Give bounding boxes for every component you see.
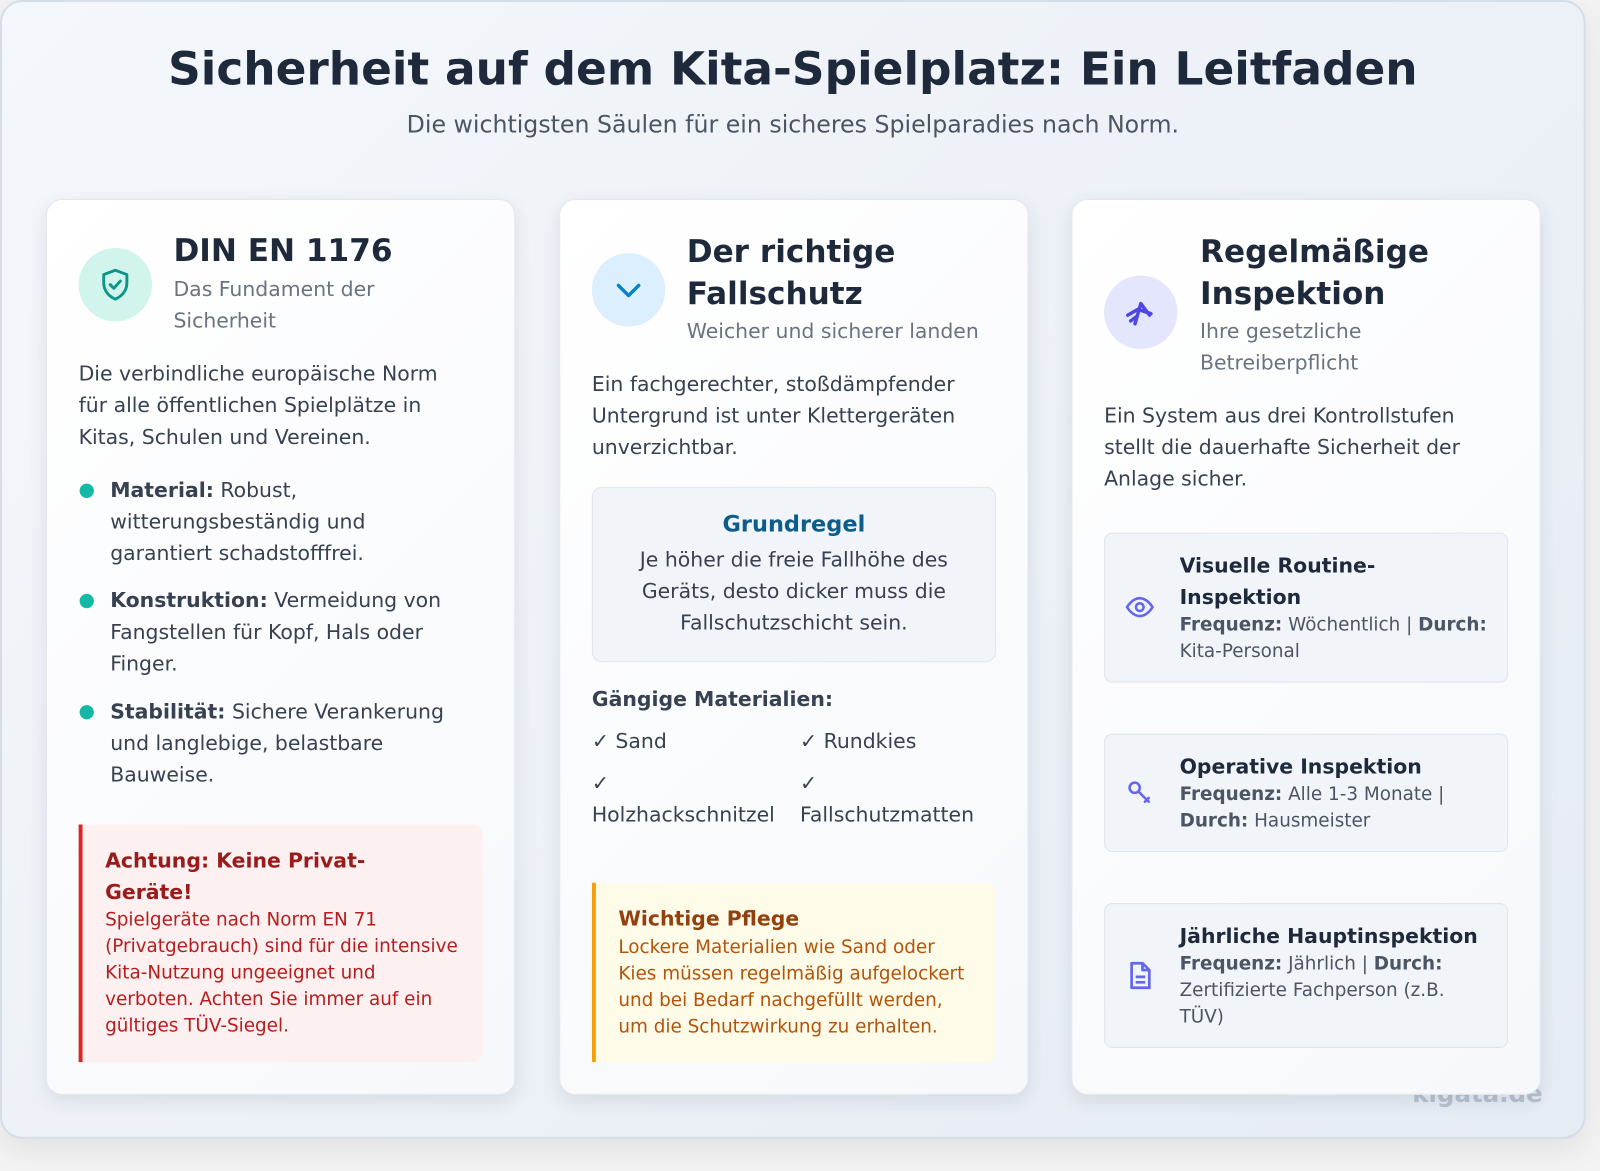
bullet: construction: Konstruktion: Vermeidung von Fangstellen für Kopf, Hals oder Finger. bbox=[110, 588, 441, 676]
materials list: ✓ bbox=[592, 770, 609, 795]
panel: Fallschutz bbox=[559, 199, 1029, 1095]
item: operative: Operative Inspektion bbox=[1180, 754, 1422, 779]
description: Die verbindliche europäische Norm für alle öffentlichen Spielplätze in Kitas, Schulen und Vereinen. bbox=[79, 361, 438, 449]
panel: Inspektion bbox=[1071, 199, 1541, 1095]
sub heading: Sicherheit bbox=[173, 308, 276, 333]
panel: DIN EN 1176 bbox=[46, 199, 515, 1095]
callout: Pflege: Wichtige Pflege bbox=[618, 906, 799, 931]
materials heading: Gängige Materialien: bbox=[592, 687, 833, 711]
materials list: Fallschutzmatten bbox=[800, 802, 974, 827]
item: visual: Visuelle Routine-Inspektion bbox=[1180, 553, 1375, 609]
bullet: material: Material: Robust, witterungsbeständig und garantiert schadstofffrei. bbox=[110, 478, 365, 565]
watermark: kigata.de bbox=[1412, 1080, 1543, 1108]
subtitle: Die wichtigsten Säulen für ein sicheres Spielparadies nach Norm. bbox=[407, 111, 1179, 139]
description: Ein fachgerechter, stoßdämpfender Untergrund ist unter Klettergeräten unverzichtbar. bbox=[592, 371, 955, 459]
item: operative bbox=[1104, 734, 1508, 852]
sub heading: Ihre gesetzliche bbox=[1200, 318, 1361, 343]
callout: Pflege bbox=[592, 883, 996, 1062]
materials list: Holzhackschnitzel bbox=[592, 802, 775, 827]
item: annual bbox=[1104, 903, 1508, 1048]
callout: warning bbox=[79, 824, 483, 1062]
sub heading bbox=[1200, 318, 1361, 374]
heading bbox=[687, 235, 895, 312]
sub heading: Betreiberpflicht bbox=[1200, 350, 1358, 374]
sub heading: Weicher und sicherer landen bbox=[687, 318, 979, 343]
heading: Der richtige bbox=[687, 235, 895, 270]
item: visual: Frequenz: Wöchentlich | Durch: Kita-Personal bbox=[1180, 614, 1487, 662]
icon: wrench bbox=[1128, 781, 1150, 804]
callout: Pflege: Lockere Materialien wie Sand oder Kies müssen regelmäßig aufgelockert und bei Bedarf nachgefüllt werden, um die Schutzwirkung zu erhalten. bbox=[618, 937, 964, 1038]
icon: eye bbox=[1126, 596, 1154, 618]
item: annual: Jährliche Hauptinspektion bbox=[1180, 923, 1478, 948]
heading: Fallschutz bbox=[687, 277, 863, 312]
bullet: stability: Stabilität: Sichere Verankerung und langlebige, belastbare Bauweise. bbox=[110, 699, 444, 787]
item: operative: Frequenz: Alle 1-3 Monate | Durch: Hausmeister bbox=[1180, 784, 1444, 832]
icon: shield bbox=[79, 248, 152, 321]
icon: chevron bbox=[592, 253, 665, 327]
materials list: ✓ Rundkies bbox=[800, 729, 916, 753]
callout: warning: Spielgeräte nach Norm EN 71 (Privatgebrauch) sind für die intensive Kita-Nutzung ungeeignet und verboten. Achten Sie immer auf ein gültiges TÜV-Siegel. bbox=[105, 909, 458, 1037]
title: Sicherheit auf dem Kita-Spielplatz: Ein Leitfaden bbox=[168, 44, 1418, 96]
icon: inspection bbox=[1104, 276, 1178, 349]
heading: DIN EN 1176 bbox=[173, 234, 393, 269]
materials list bbox=[592, 729, 974, 827]
sub heading: Das Fundament der bbox=[173, 277, 375, 301]
sub heading bbox=[173, 277, 375, 333]
icon: document bbox=[1130, 962, 1151, 990]
callout: Grundregel bbox=[592, 487, 996, 662]
callout: Grundregel: Grundregel bbox=[722, 512, 865, 538]
item: visual bbox=[1104, 533, 1508, 683]
heading: Regelmäßige bbox=[1200, 235, 1429, 270]
description: Ein System aus drei Kontrollstufen stellt die dauerhafte Sicherheit der Anlage sicher. bbox=[1104, 403, 1460, 491]
callout: Grundregel: Je höher die freie Fallhöhe des Geräts, desto dicker muss die Fallschutzschicht sein. bbox=[640, 547, 948, 635]
materials list: ✓ bbox=[800, 770, 817, 795]
callout: warning: Achtung: Keine Privat-Geräte! bbox=[105, 848, 365, 904]
heading bbox=[1200, 235, 1429, 312]
materials list: ✓ Sand bbox=[592, 729, 667, 753]
heading: Inspektion bbox=[1200, 277, 1385, 312]
item: annual: Frequenz: Jährlich | Durch: Zertifizierte Fachperson (z.B. TÜV) bbox=[1180, 953, 1445, 1028]
